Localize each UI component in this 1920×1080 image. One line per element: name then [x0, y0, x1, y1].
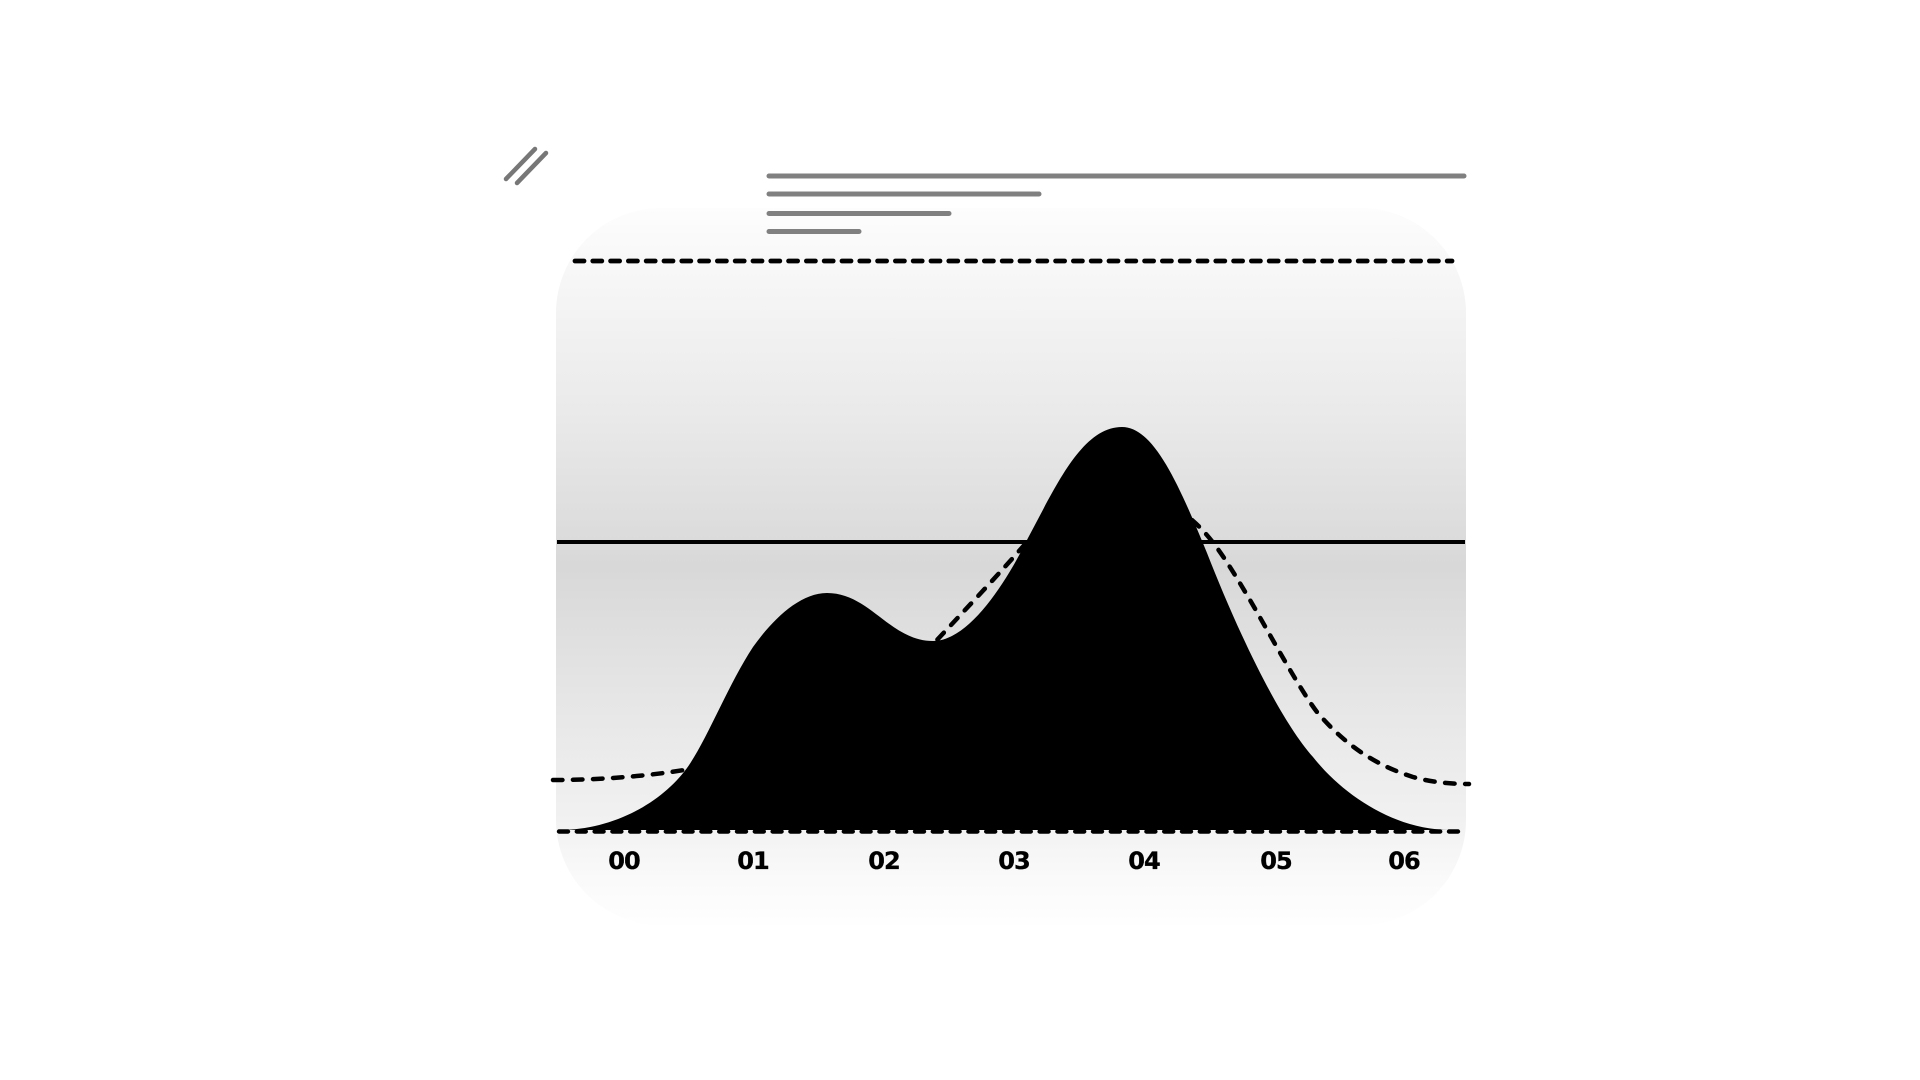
x-axis labels: 03 — [998, 847, 1030, 875]
solid threshold line — [557, 540, 1465, 544]
x-axis labels: 00 — [608, 847, 640, 875]
panel: chart background — [556, 208, 1466, 925]
x-axis labels: 01 — [737, 847, 769, 875]
baseline dashed line — [559, 829, 1461, 834]
dashed curve — [553, 492, 1469, 784]
black area curve — [560, 427, 1450, 830]
text placeholder lines — [769, 176, 1464, 232]
x-axis labels: 04 — [1128, 847, 1160, 875]
x-axis labels: 02 — [868, 847, 900, 875]
top dashed reference line — [575, 259, 1452, 263]
x-axis labels: 05 — [1260, 847, 1292, 875]
icon: double slash — [506, 149, 546, 183]
x-axis labels: 06 — [1388, 847, 1420, 875]
x-axis labels — [608, 847, 1420, 875]
